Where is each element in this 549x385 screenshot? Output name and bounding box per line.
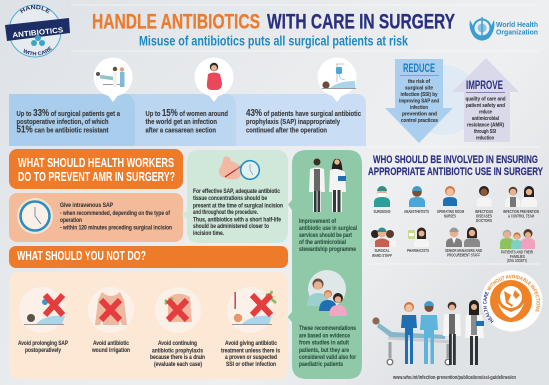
panel: give intravenous SAP: - within 120 minutes preceding surgical incision (60, 224, 172, 232)
panel: what not to do: Avoid prolonging SAP (18, 340, 68, 347)
icon: patient on drip bubble (318, 58, 356, 102)
icon: operating room nurses: OPERATING ROOM (437, 209, 464, 214)
figure: surgeon (420, 301, 438, 364)
icon: avoid treatment without infection (227, 287, 276, 333)
icon: senior managers and procurement staff (445, 227, 482, 258)
decorative circle behind arrows (409, 65, 479, 135)
panel: give intravenous SAP: - when recommended, depending on the type of (60, 210, 171, 217)
panel: what not to do: antibiotic prophylaxis (152, 348, 203, 354)
title: HANDLE ANTIBIOTICS (92, 10, 260, 34)
arrow: improve: reduce (479, 109, 492, 115)
arrow: reduce: prevention and (402, 112, 437, 118)
panel: what not to do: Avoid giving antibiotic (225, 340, 277, 347)
icon: clock (17, 198, 53, 234)
panel: stewardship and paediatric: considered valid also for (299, 354, 356, 361)
text: statistic 15 percent: the world get an infection (146, 117, 217, 126)
text: statistic 43 percent (246, 108, 361, 134)
panel: stewardship and paediatric: of the antimicrobial (299, 239, 346, 246)
arrow: improve: patient safety and (466, 103, 505, 109)
panel: stewardship and paediatric: services should be part (299, 232, 353, 239)
icon: patients and families: (CIVIL SOCIETY) (507, 258, 527, 263)
icon: infectious diseases doctors: DISEASES (476, 214, 492, 218)
icon: pregnant woman bubble (194, 58, 234, 102)
icon: patients and families: FAMILIES (510, 254, 525, 259)
icon: surgical ward staff (369, 228, 396, 258)
heading: what should health workers do: DO TO PREVENT AMR IN SURGERY? (18, 169, 175, 184)
icon: infectious diseases doctors (475, 186, 493, 223)
arrow: improve: resistance (AMR) (467, 122, 504, 128)
panel: what not to do: a proven or suspected (225, 354, 277, 361)
panel: what not to do: wound irrigation (91, 347, 130, 354)
panel: effective SAP: tissue concentrations should be (193, 195, 267, 202)
arrow: reduce: REDUCE (403, 63, 435, 75)
arrow: improve: quality of care and (466, 96, 506, 102)
title (92, 10, 455, 34)
icon: family (307, 270, 347, 316)
text: statistic 43 percent: 43% of patients have surgical antibiotic (246, 108, 361, 119)
arrow: reduce: improving SAP and (399, 99, 439, 105)
panel: give intravenous SAP: operation (60, 217, 82, 224)
panel: stewardship and paediatric: Improvement of (299, 218, 337, 225)
icon: patients and families (500, 229, 535, 263)
icon: WHO logo (470, 17, 538, 40)
icon: patients and families: PATIENTS AND THEIR (501, 250, 533, 254)
panel: effective SAP: incision time. (193, 230, 224, 237)
arrow: improve: antimicrobial (472, 116, 499, 122)
panel: what not to do: SSI or other infection (226, 361, 276, 368)
panel: effective SAP (182, 150, 288, 243)
panel: stewardship and paediatric: These recommendations (299, 325, 356, 332)
logo: handle antibiotics with care (5, 4, 70, 58)
icon: avoid prophylaxis with drain (155, 287, 201, 333)
icon: anaesthetists: ANAESTHETISTS (404, 209, 429, 214)
panel: effective SAP: Thus, antibiotics with a short half-life (193, 216, 281, 224)
panel: stewardship and paediatric: stewardship programme (299, 246, 356, 253)
panel: effective SAP: should be administered closer to (193, 223, 269, 230)
icon: surgeons: SURGEONS (374, 209, 391, 214)
text: statistic 43 percent: prophylaxis (SAP) inappropriately (246, 117, 341, 126)
panel: what not to do: Avoid continuing (158, 340, 197, 347)
text: statistic 33 percent: postoperative infection, of which (16, 117, 109, 126)
subtitle: Misuse of antibiotics puts all surgical patients at risk (139, 32, 408, 48)
logo: handle antibiotics with care: ANTIBIOTICS (12, 25, 64, 40)
icon: incision with magnifier (219, 156, 259, 180)
figure: nurse (401, 302, 417, 364)
icon: stretcher bubble (94, 58, 132, 102)
panel: what not to do: because there is a drain (150, 354, 205, 361)
logo: handle antibiotics with care: WITH CARE (24, 46, 52, 56)
icon: senior managers and procurement staff: SENIOR MANAGERS AND (445, 248, 482, 253)
icon: surgeons (374, 186, 391, 214)
icon: infectious diseases doctors: INFECTIOUS (475, 209, 493, 214)
text: statistic 33 percent: Up to 33% of surgical patients get a (16, 108, 121, 119)
icon: WHO logo: World Health (496, 20, 538, 29)
icon: two doctors (309, 158, 346, 212)
logo: handle antibiotics with care: HANDLE (20, 5, 50, 14)
heading: who should be involved (368, 154, 543, 178)
panel: effective SAP: and throughout the procedure. (193, 209, 258, 216)
heading: what should health workers do (9, 149, 183, 189)
panel: what not to do (9, 272, 288, 379)
arrow: reduce: control practices (401, 118, 438, 124)
heading: what should you not do: WHAT SHOULD YOU NOT DO? (17, 248, 146, 263)
panel: stewardship and paediatric: from studies in adult (299, 340, 350, 346)
arrow: improve: through SSI (474, 129, 496, 135)
panel: stewardship and paediatric (288, 150, 362, 379)
arrow: improve: IMPROVE (466, 80, 503, 92)
icon: operating room nurses: NURSES (444, 214, 456, 218)
panel: give intravenous SAP (9, 193, 183, 242)
title: WITH CARE IN SURGERY (267, 10, 455, 34)
illustration: patient on stretcher with care team (372, 300, 484, 365)
icon: surgical ward staff: SURGICAL (374, 248, 390, 253)
panel: what not to do: treatment unless there is (221, 348, 280, 354)
arrow: reduce: surgical site (405, 85, 433, 91)
panel: what not to do: postoperatively (25, 347, 61, 354)
icon: avoid wound irrigation (88, 287, 134, 333)
panel: what not to do: (evaluate each case) (154, 361, 202, 368)
panel: stewardship and paediatric: patients, but they are (299, 347, 349, 354)
figure: doctor (443, 302, 461, 365)
icon: infectious diseases doctors: DOCTORS (476, 218, 492, 223)
arrow: reduce: the risk of (408, 79, 430, 85)
panel: stewardship and paediatric: are based on evidence (299, 332, 350, 340)
arrow: improve (452, 58, 519, 142)
arrow: reduce: infection (410, 105, 428, 111)
panel: stewardship and paediatric: paediatric patients (299, 361, 343, 368)
panel: what not to do: Avoid antibiotic (93, 340, 129, 347)
icon: surgical ward staff: WARD STAFF (372, 253, 392, 258)
icon: anaesthetists (404, 186, 429, 214)
icon: infection prevention and control team (503, 186, 539, 218)
text: statistic 15 percent (146, 108, 228, 134)
arrow: reduce: infection (SSI) by (400, 92, 438, 98)
icon: avoid prolonging SAP (19, 287, 65, 333)
panel: stewardship and paediatric: antibiotic use in surgical (299, 225, 357, 232)
arrow: improve: reduction (476, 135, 494, 141)
heading: what should you not do (9, 246, 288, 268)
text: statistic 33 percent (16, 108, 121, 136)
panel: statistics band (9, 94, 366, 146)
text: statistic 33 percent: 51% can be antibiotic resistant (16, 124, 109, 136)
icon: senior managers and procurement staff: PROCUREMENT STAFF (447, 252, 480, 258)
panel: effective SAP: present at the time of surgical incision (193, 202, 283, 210)
icon: operating room nurses (437, 186, 464, 218)
icon: pharmacists (407, 228, 429, 253)
text: statistic 15 percent: after a caesarean section (146, 126, 216, 134)
text: statistic 15 percent: Up to 15% of women around (146, 108, 228, 119)
badge: health care without avoidable infections: HEALTH CARE WITHOUT AVOIDABLE INFECTIONS (483, 274, 540, 324)
icon: infection prevention and control team: & CONTROL TEAM (508, 214, 534, 218)
panel: give intravenous SAP: Give intravenous SAP (60, 202, 113, 209)
panel: effective SAP: For effective SAP, adequate antibiotic (193, 188, 280, 195)
icon: pharmacists: PHARMACISTS (407, 248, 429, 253)
heading: what should health workers do: WHAT SHOULD HEALTH WORKERS (18, 155, 174, 170)
figure: female doctor (465, 300, 484, 365)
icon: WHO logo: Organization (496, 28, 538, 36)
arrow: reduce (385, 59, 453, 143)
text: statistic 43 percent: continued after the operation (246, 126, 327, 134)
